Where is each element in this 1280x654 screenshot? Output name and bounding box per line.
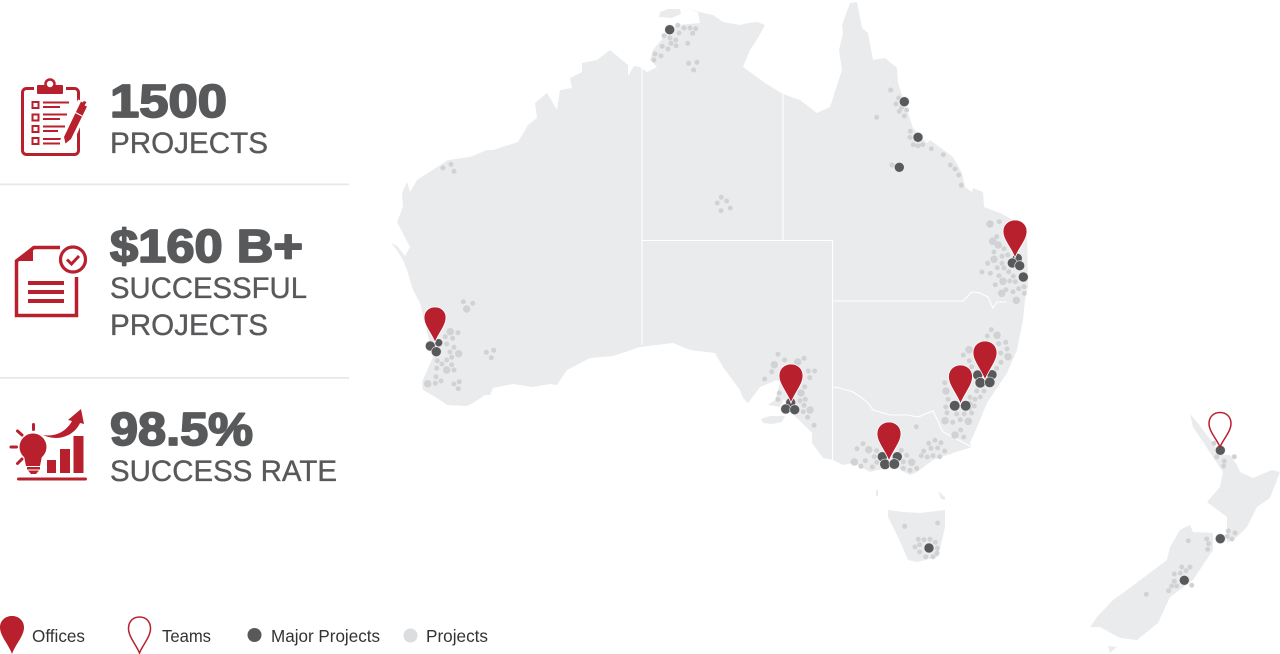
legend: projects: Projects [426, 626, 488, 646]
team pin: Auckland [1209, 412, 1231, 447]
landmass: Kangaroo Island [761, 416, 785, 424]
legend: major projects: Major Projects [271, 626, 380, 646]
legend [0, 616, 488, 654]
state borders [642, 67, 1007, 460]
legend: teams: Teams [162, 626, 211, 646]
landmass: New Zealand South Island [1090, 525, 1213, 653]
project dots: Northern Territory [654, 25, 730, 211]
landmass: New Zealand North Island [1190, 414, 1280, 543]
stat label: projects: PROJECTS [110, 309, 268, 342]
project dots: Western Australia [425, 302, 494, 389]
stat value: $160 B+: $160 B+ [110, 220, 303, 272]
project dots: Tasmania [905, 523, 938, 557]
office pin: Sydney [973, 341, 997, 380]
map: Australia and New Zealand [391, 2, 1280, 653]
legend: teams [128, 617, 211, 653]
project dots: South Australia [765, 354, 815, 425]
panel: successful projects stat [15, 220, 307, 342]
legend: offices [0, 616, 85, 654]
panel: success rate stat [11, 403, 337, 488]
office pin: Melbourne [877, 422, 901, 461]
legend: offices: Offices [32, 626, 85, 646]
stat value: 98.5%: 98.5% [110, 403, 253, 455]
landmass: Australia mainland [391, 2, 1028, 475]
icon: light bulb with growth chart [11, 409, 87, 480]
project dots: Queensland [877, 90, 1028, 300]
landmass: Flinders Island [938, 491, 945, 500]
project dots: Victoria [854, 427, 945, 470]
landmass: Tasmania [888, 510, 945, 562]
project dots: New Zealand [1146, 443, 1235, 594]
stat label: success rate: SUCCESS RATE [110, 455, 337, 488]
stat label: projects: PROJECTS [110, 127, 268, 160]
divider [0, 184, 349, 185]
office pin: Perth [424, 307, 446, 342]
panel: projects stat [22, 75, 268, 160]
office pin: Adelaide [779, 364, 803, 403]
stat value: 1500: 1500 [110, 75, 227, 127]
icon: document with check badge [15, 246, 86, 316]
office pin: Canberra [948, 365, 972, 404]
landmass: King Island [876, 490, 878, 496]
landmass: Melville and Bathurst islands [659, 9, 681, 18]
project dots: Pilbara [443, 164, 454, 171]
divider [0, 377, 349, 379]
stat label: successful: SUCCESSFUL [110, 272, 307, 305]
office pin: Brisbane [1003, 220, 1027, 258]
icon: clipboard checklist with pen [22, 80, 87, 154]
project dots: New South Wales [945, 330, 1008, 437]
